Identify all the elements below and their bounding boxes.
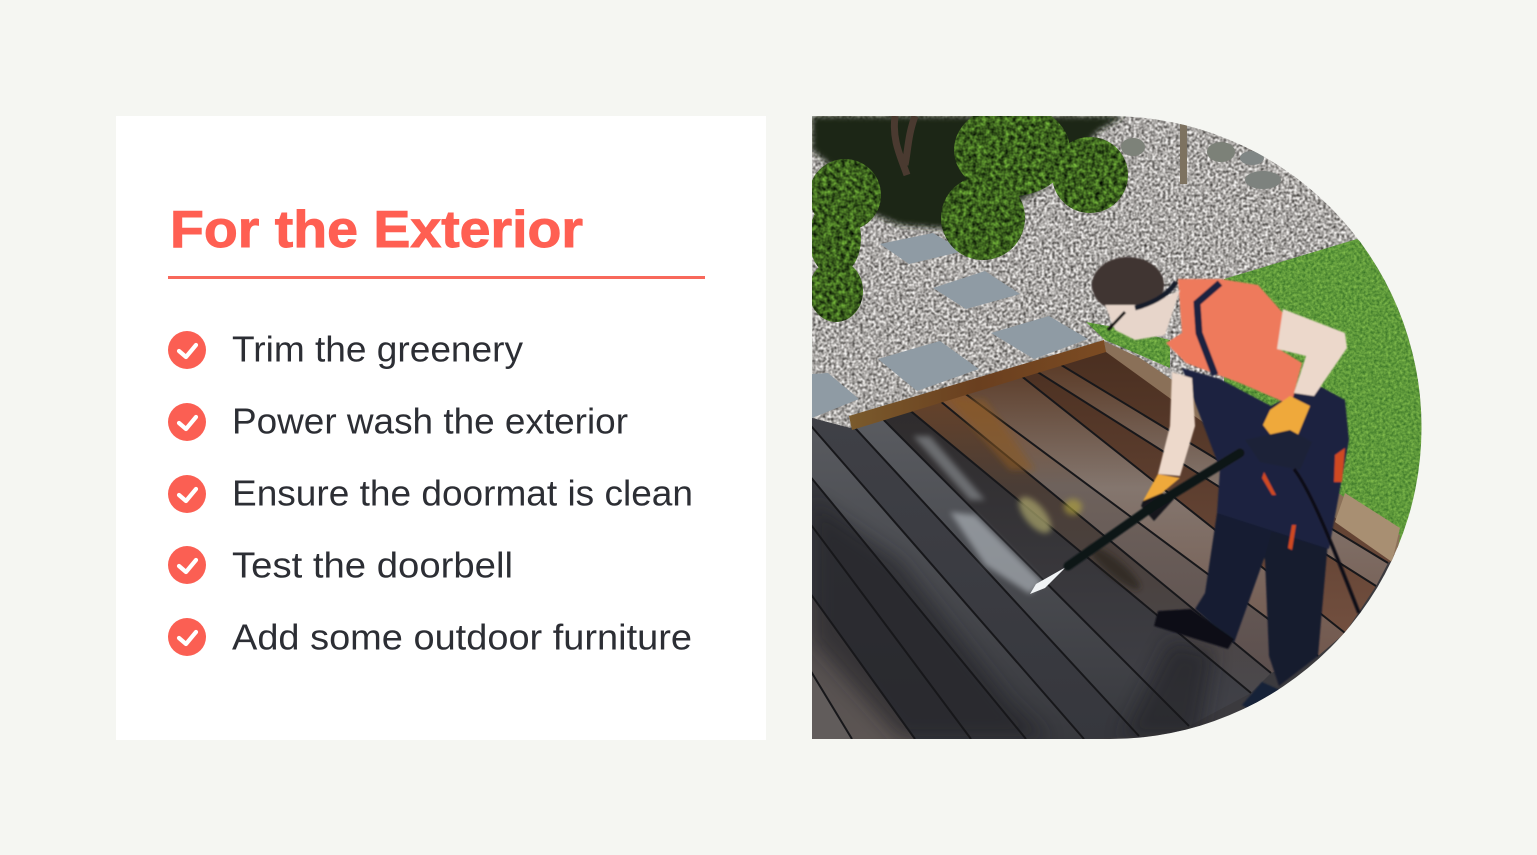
hose [1294,469,1359,613]
gravel bed [812,116,1422,436]
wet spots and spray trail [913,395,1145,595]
overall strap [1197,283,1220,375]
shirt [1166,279,1302,405]
deck planks [812,347,1394,739]
list item: trim the greenery: Trim the greenery [232,328,523,370]
leaning arm [1158,372,1195,476]
panel: checklist card [116,116,766,740]
lance [1068,453,1240,566]
dark garden shade [812,116,1125,230]
list item: doormat: Ensure the doormat is clean [232,472,693,514]
deck edge boards [849,340,1400,565]
front leg and boot [1194,512,1265,642]
list item: power wash: Power wash the exterior [232,400,628,442]
yellow gloves [1262,396,1312,436]
deck shadows [812,500,1215,739]
pressure washer spray [950,512,1066,594]
head [1092,257,1164,313]
back leg [1264,530,1328,686]
worker [1068,257,1359,710]
lawn [1086,239,1440,560]
heading underline [168,276,705,279]
photo: man power washing a wooden deck [812,116,1422,739]
bib and hips [1182,368,1349,549]
heading: For the Exterior [170,201,583,259]
list item: doorbell: Test the doorbell [232,544,513,586]
landscaping rocks and post [1121,118,1281,189]
shrubs [809,104,1128,322]
list item: furniture: Add some outdoor furniture [232,616,692,658]
pocket accents [1262,448,1345,550]
plank seams [812,365,1388,739]
infographic canvas [116,116,1422,740]
stepping stones [812,233,1088,418]
arm on hip [1277,309,1347,396]
